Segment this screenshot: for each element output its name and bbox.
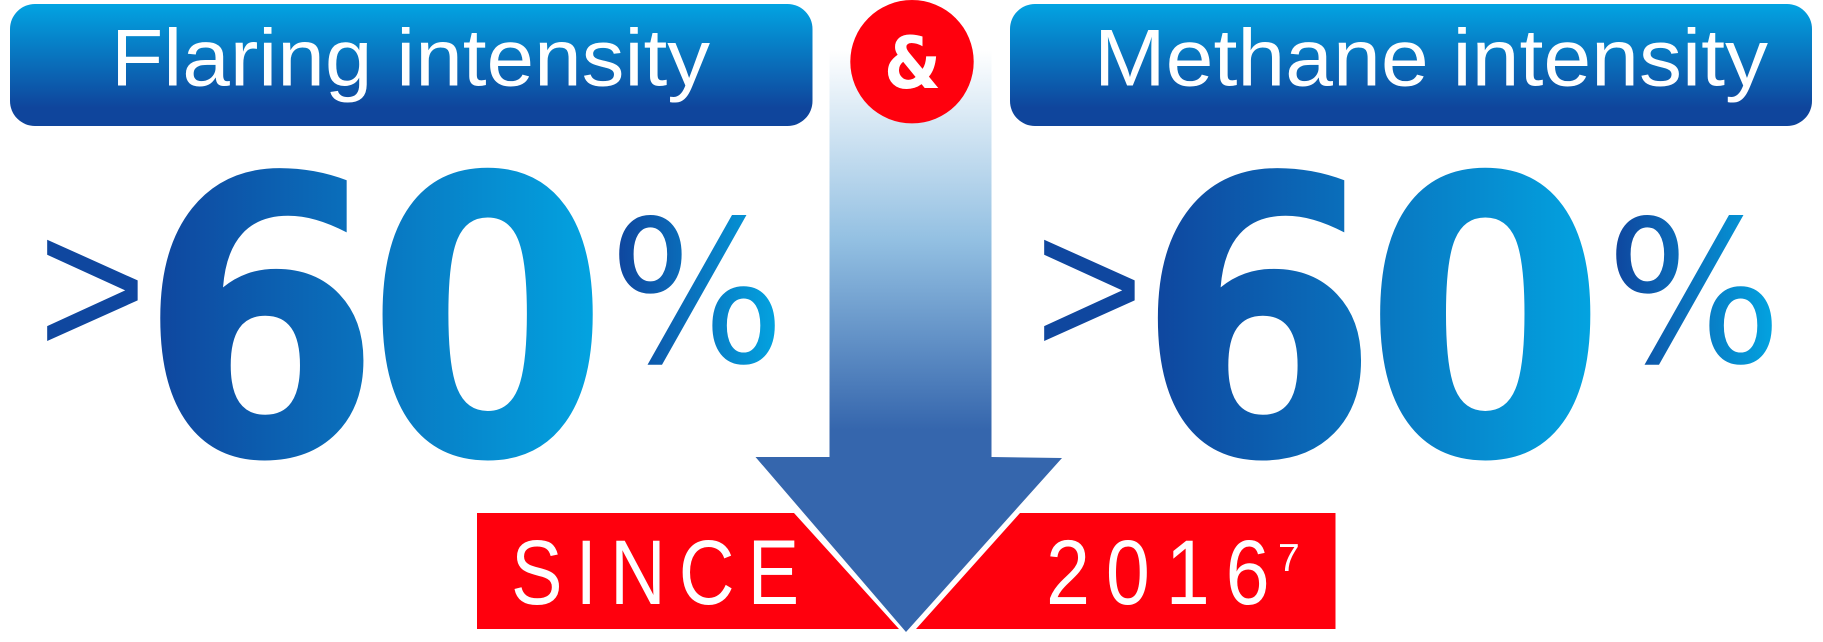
badge: 2016 with footnote 7: [916, 513, 1336, 629]
badge: since: SINCE: [511, 522, 799, 625]
ampersand circle: [850, 0, 974, 123]
panel: methane intensity: [1010, 4, 1812, 547]
panel: flaring intensity: [10, 4, 812, 547]
badge: 2016 with footnote 7: 7: [1278, 537, 1300, 580]
greater-than sign: >: [1035, 175, 1144, 398]
big number 60: 60: [139, 96, 610, 547]
greater-than sign: >: [38, 175, 147, 398]
central down arrow: [756, 50, 1062, 632]
header: flaring intensity: Flaring intensity: [111, 14, 711, 104]
big number 60: 60: [1136, 96, 1607, 547]
badge: since: [477, 513, 899, 629]
header: methane intensity: [1010, 4, 1812, 126]
header: methane intensity: Methane intensity: [1094, 14, 1769, 104]
header: flaring intensity: [10, 4, 812, 126]
percent sign: %: [1606, 178, 1782, 409]
ampersand circle: &: [884, 21, 941, 105]
badge: 2016 with footnote 7: 2016: [1046, 521, 1270, 624]
percent sign: %: [609, 178, 785, 409]
